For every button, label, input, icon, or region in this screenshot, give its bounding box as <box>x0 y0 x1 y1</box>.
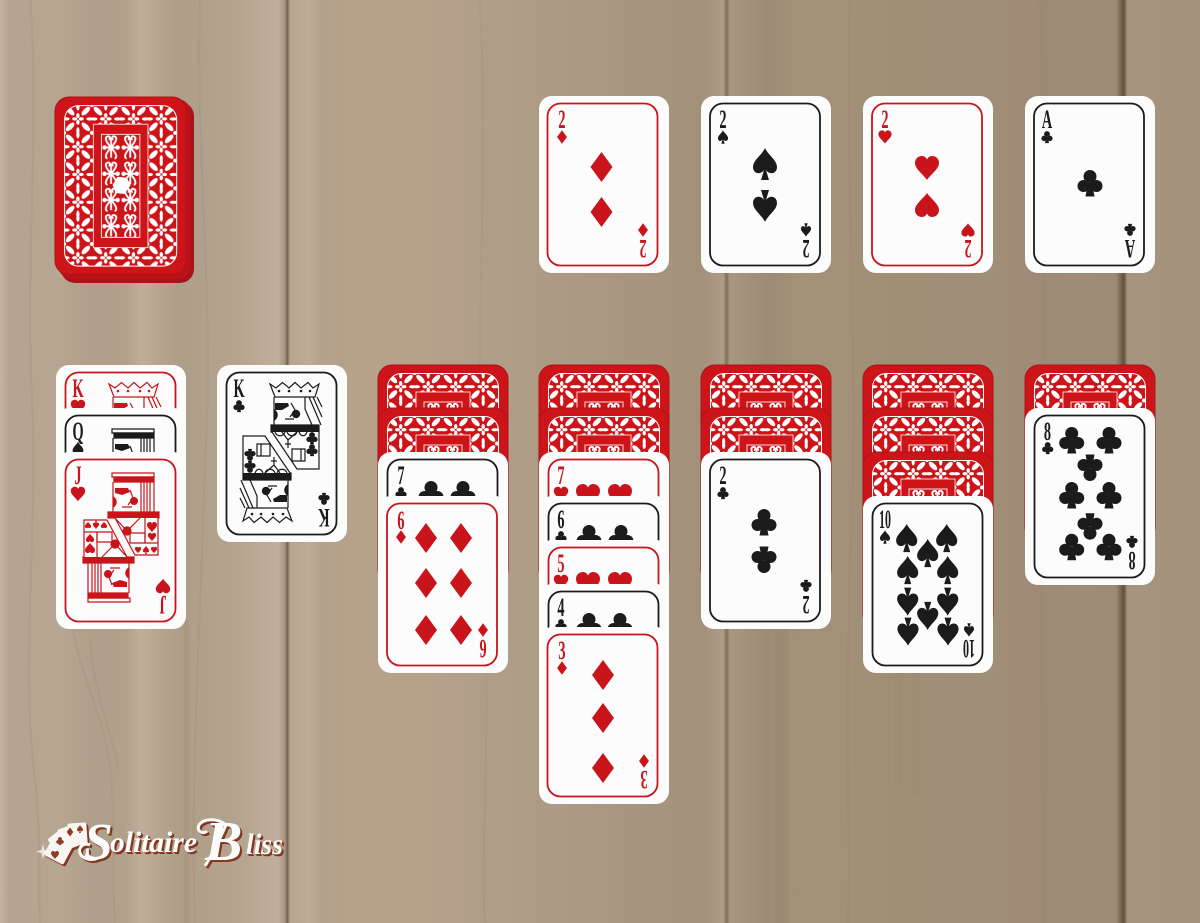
face-down card <box>701 408 831 584</box>
face-down card <box>863 408 993 584</box>
foundation: two of hearts: 2 <box>964 234 972 264</box>
three of diamonds: 3 <box>640 765 648 795</box>
face-down card <box>539 408 669 584</box>
stock pile: face-down deck <box>55 97 194 283</box>
face-down card <box>1025 365 1155 541</box>
tableau column 1: king, queen, jack <box>56 365 186 629</box>
ten of spades <box>863 496 993 673</box>
logo wordmark with swashes <box>80 811 283 873</box>
five of hearts <box>539 540 669 717</box>
logo wordmark with swashes: olitaire <box>110 826 197 859</box>
foundation: two of diamonds: 2 <box>639 234 647 264</box>
foundation: ace of clubs: A <box>1042 104 1052 134</box>
seven of hearts <box>539 452 669 629</box>
foundation: two of diamonds: 2 <box>558 104 566 134</box>
tableau column 7: one back, eight of clubs <box>1025 365 1155 585</box>
foundation: ace of clubs <box>1025 96 1155 273</box>
tableau column 6: three backs, ten of spades <box>863 365 993 673</box>
foundation: two of spades: 2 <box>802 234 810 264</box>
eight of clubs: 8 <box>1044 416 1051 446</box>
tableau column 2: king of clubs: K <box>318 503 330 533</box>
three of diamonds <box>539 627 669 804</box>
eight of clubs <box>1025 408 1155 585</box>
six of diamonds: 6 <box>397 505 405 535</box>
tableau column 2: king of clubs <box>217 365 347 542</box>
jack of hearts <box>56 452 186 629</box>
face-down card <box>701 365 831 541</box>
foundation: two of hearts <box>863 96 993 273</box>
face-down card <box>863 452 993 628</box>
foundation: two of spades: 2 <box>719 104 727 134</box>
ten of spades: 10 <box>963 634 975 662</box>
jack of hearts: J <box>74 460 82 490</box>
seven of clubs: 7 <box>397 460 405 490</box>
face-down card <box>863 365 993 541</box>
tableau column 5: two backs, two of clubs <box>701 365 831 629</box>
face-down card <box>378 365 508 541</box>
jack of hearts: J <box>159 590 167 620</box>
logo wordmark with swashes: S <box>84 814 113 871</box>
logo wordmark with swashes: B <box>204 811 242 873</box>
seven of hearts: 7 <box>557 460 565 490</box>
icon: sparkle <box>36 844 50 859</box>
logo: Solitaire Bliss <box>36 811 283 873</box>
three of diamonds: 3 <box>558 635 566 665</box>
two of clubs: 2 <box>802 590 810 620</box>
tableau column 3: two backs, seven, six <box>378 365 508 673</box>
six of diamonds: 6 <box>479 634 487 664</box>
ten of spades: 10 <box>879 506 891 534</box>
face-down card <box>378 408 508 584</box>
foundation: two of spades <box>701 96 831 273</box>
two of clubs: 2 <box>719 460 727 490</box>
six of clubs <box>539 496 669 673</box>
icon: fan of cards <box>44 822 88 865</box>
six of clubs: 6 <box>557 504 565 534</box>
foundation: two of hearts: 2 <box>881 104 889 134</box>
tableau column 2: king of clubs: K <box>233 373 245 403</box>
king of hearts: K <box>72 373 84 403</box>
king of hearts <box>56 365 186 542</box>
four of clubs <box>539 584 669 761</box>
seven of clubs <box>378 452 508 629</box>
queen of spades: Q <box>72 416 84 446</box>
tableau column 4: two backs, seven to three run <box>539 365 669 804</box>
face-down card <box>539 365 669 541</box>
two of clubs <box>701 452 831 629</box>
four of clubs: 4 <box>557 592 565 622</box>
logo wordmark with swashes: liss <box>246 828 283 861</box>
eight of clubs: 8 <box>1128 546 1136 576</box>
foundation: ace of clubs: A <box>1125 234 1135 264</box>
queen of spades <box>56 408 186 585</box>
foundation: two of diamonds <box>539 96 669 273</box>
six of diamonds <box>378 496 508 673</box>
five of hearts: 5 <box>557 548 565 578</box>
